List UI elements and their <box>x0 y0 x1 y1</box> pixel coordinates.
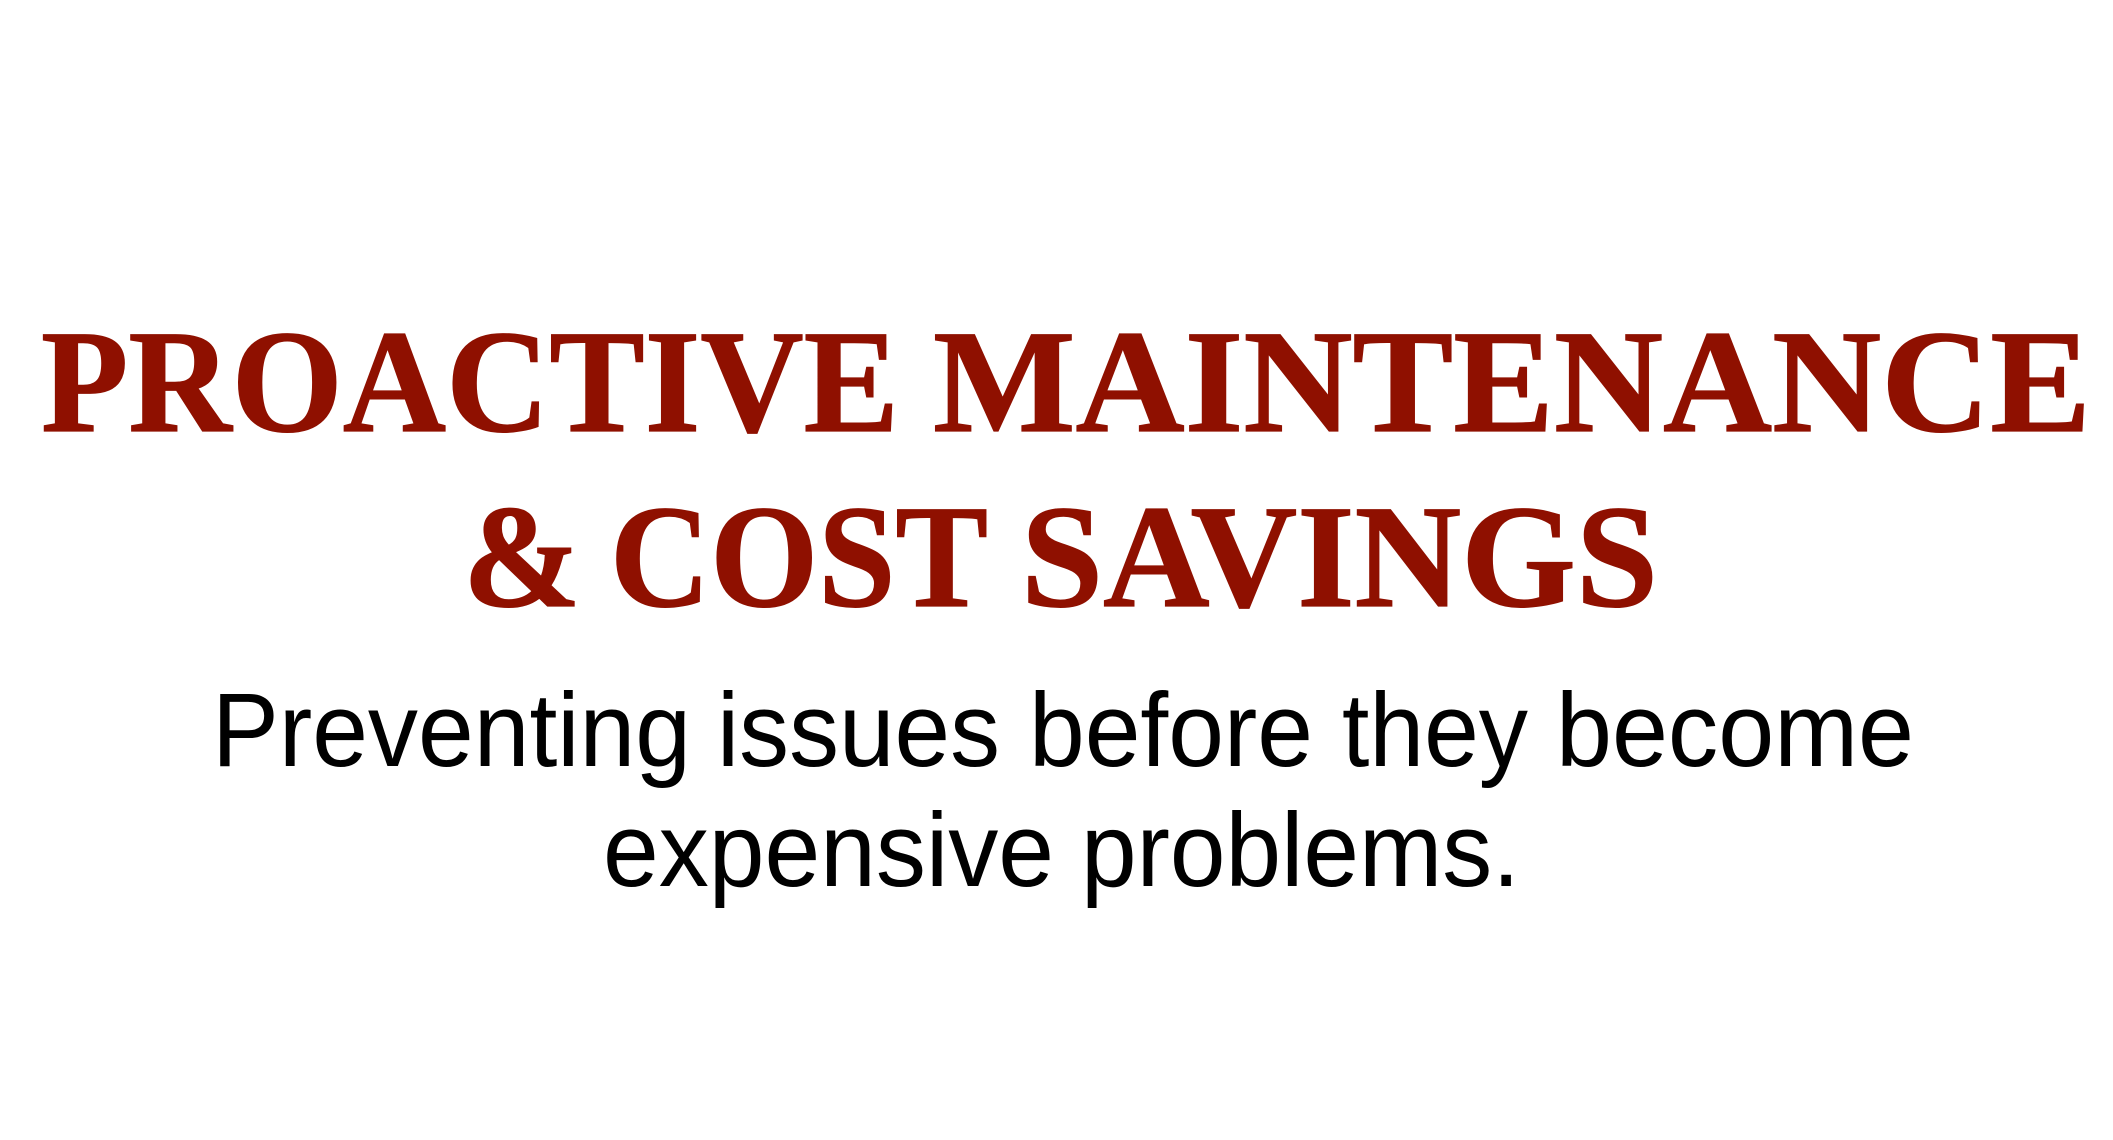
subtitle: problems. <box>1081 792 1520 909</box>
title: MAINTENANCE <box>933 300 2091 463</box>
title: & <box>463 475 581 638</box>
title: PROACTIVE <box>41 300 899 463</box>
subtitle <box>212 672 1914 909</box>
subtitle: they <box>1342 672 1528 789</box>
subtitle: issues <box>717 672 1000 789</box>
title <box>41 300 2091 638</box>
title: COST <box>610 475 988 638</box>
subtitle: expensive <box>603 792 1054 909</box>
subtitle: become <box>1556 672 1914 789</box>
title: SAVINGS <box>1021 475 1658 638</box>
subtitle: Preventing <box>212 672 691 789</box>
subtitle: before <box>1029 672 1313 789</box>
